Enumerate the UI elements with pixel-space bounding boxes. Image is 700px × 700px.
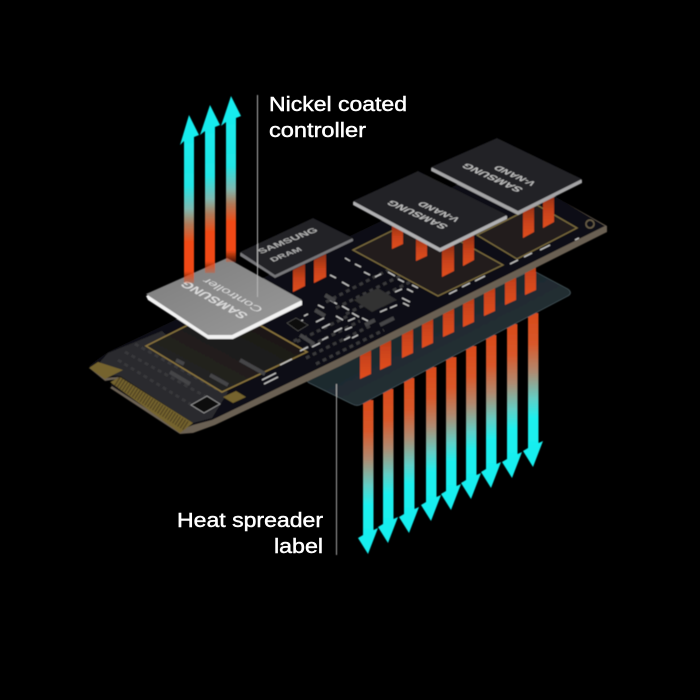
label: heat spreader label: label (274, 536, 323, 558)
large gold connector (110, 377, 193, 433)
controller brand text: SAMSUNG (177, 279, 252, 321)
lighter board section at the connector end (100, 331, 228, 423)
leader line: heat spreader (336, 384, 338, 555)
orange heat bars between board and spreader (360, 250, 536, 379)
small gold connector (89, 362, 123, 379)
nickel coated controller chip (146, 258, 302, 339)
NAND pad two (477, 205, 577, 259)
artwork group (89, 95, 607, 555)
upward heat arrows (180, 96, 241, 283)
small black chip centre (287, 318, 308, 331)
DRAM brand text: SAMSUNG (256, 226, 321, 256)
downward heat arrows (358, 313, 543, 554)
leader line: controller (256, 95, 258, 297)
V-NAND chip one legs (392, 224, 474, 277)
V-NAND chip two legs (523, 194, 554, 238)
controller pad (146, 306, 307, 392)
chip two brand text: SAMSUNG (459, 162, 527, 193)
label: nickel coated controller: controller (269, 120, 366, 142)
circuit board (89, 164, 607, 434)
label: heat spreader label (177, 510, 323, 558)
NAND pad one (353, 218, 503, 296)
label: nickel coated controller: Nickel coated (269, 94, 407, 116)
label: nickel coated controller (269, 94, 407, 142)
central microchip (354, 288, 397, 312)
small surface components (262, 238, 579, 384)
label: heat spreader label: Heat spreader (177, 510, 323, 532)
chip one brand text: SAMSUNG (384, 199, 452, 230)
V-NAND chip two (431, 138, 582, 215)
heat spreader label (307, 271, 570, 406)
DRAM type text: DRAM (268, 246, 304, 263)
board surface (89, 164, 605, 430)
controller type text: Controller (199, 276, 267, 314)
small black chip left (191, 396, 220, 413)
board edge (89, 166, 607, 434)
DRAM chip (240, 218, 353, 278)
chip one type text: V-NAND (415, 200, 464, 223)
chip two type text: V-NAND (491, 164, 540, 187)
V-NAND chip one (353, 171, 507, 252)
grey surface components (170, 295, 394, 385)
board speckle texture (118, 268, 414, 410)
connector contacts (117, 381, 186, 426)
gold pad corner (223, 391, 246, 403)
mounting hole (586, 220, 594, 228)
DRAM legs (293, 254, 326, 292)
